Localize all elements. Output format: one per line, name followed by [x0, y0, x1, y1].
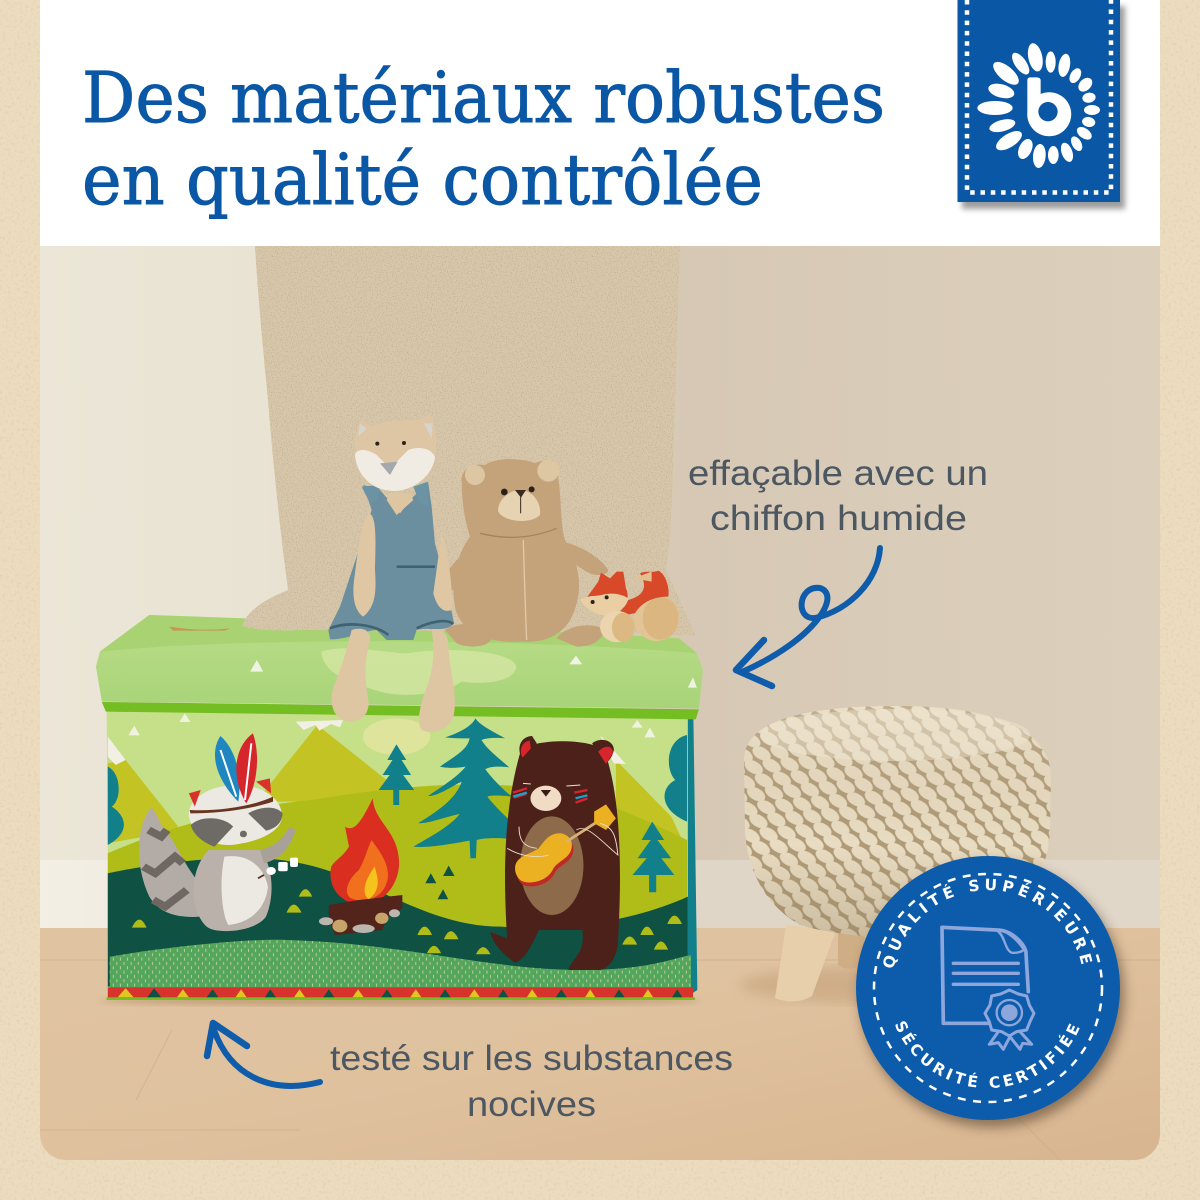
- arrow: to box base: [207, 1023, 320, 1086]
- annotation: top: [690, 460, 986, 530]
- seal text bottom: SÉCURITÉ CERTIFIÉE: [895, 1021, 1080, 1088]
- baseboard: [40, 860, 1160, 928]
- annotation: top: chiffon humide: [710, 499, 967, 538]
- title band: [40, 0, 1160, 246]
- mountains: [108, 725, 687, 850]
- annotation: top: effaçable avec un: [688, 454, 988, 493]
- doll legs: [332, 629, 370, 721]
- annotation: bottom: [330, 1044, 732, 1116]
- doll overalls: [328, 483, 454, 640]
- wooden fox toy: [580, 571, 679, 642]
- brown bear with guitar: [490, 736, 620, 970]
- quality seal badge: [853, 855, 1132, 1134]
- raccoon: [139, 778, 298, 931]
- pouf stool: [744, 706, 1051, 1002]
- campfire: [319, 798, 402, 935]
- green edge band: [102, 702, 699, 719]
- small triangles and mounds: [132, 889, 682, 954]
- box side edge: [687, 717, 697, 997]
- doll arms: [353, 513, 376, 617]
- guitar: [515, 804, 616, 886]
- icon: flower b logo: [977, 42, 1100, 168]
- wooden floor: [40, 928, 1160, 1160]
- fox doll in blue overalls: [328, 413, 455, 732]
- annotation: bottom: nocives: [467, 1085, 596, 1124]
- lid: [96, 615, 703, 719]
- product photo panel: [40, 246, 1160, 1160]
- doll fox head: [355, 413, 436, 491]
- brand logo label: [958, 0, 1125, 209]
- storage box: [96, 615, 703, 1000]
- teddy bear plush: [445, 459, 608, 647]
- icon: certificate: [942, 927, 1034, 1049]
- seal text top: QUALITÉ SUPÉRIEURE: [883, 878, 1092, 968]
- heading: en qualité contrôlée: [82, 139, 763, 221]
- plush toys group: [328, 413, 679, 732]
- hills: [108, 784, 687, 943]
- annotation: bottom: testé sur les substances: [330, 1039, 733, 1078]
- heading: Des matériaux robustes: [82, 57, 885, 139]
- trees: [108, 718, 687, 892]
- feather headdress: [215, 733, 257, 803]
- burlap pillow: [242, 246, 696, 636]
- box artwork: [106, 710, 697, 1000]
- wall: [40, 246, 1160, 866]
- arrow: to lid: [736, 548, 880, 686]
- patterned strip: [108, 987, 693, 998]
